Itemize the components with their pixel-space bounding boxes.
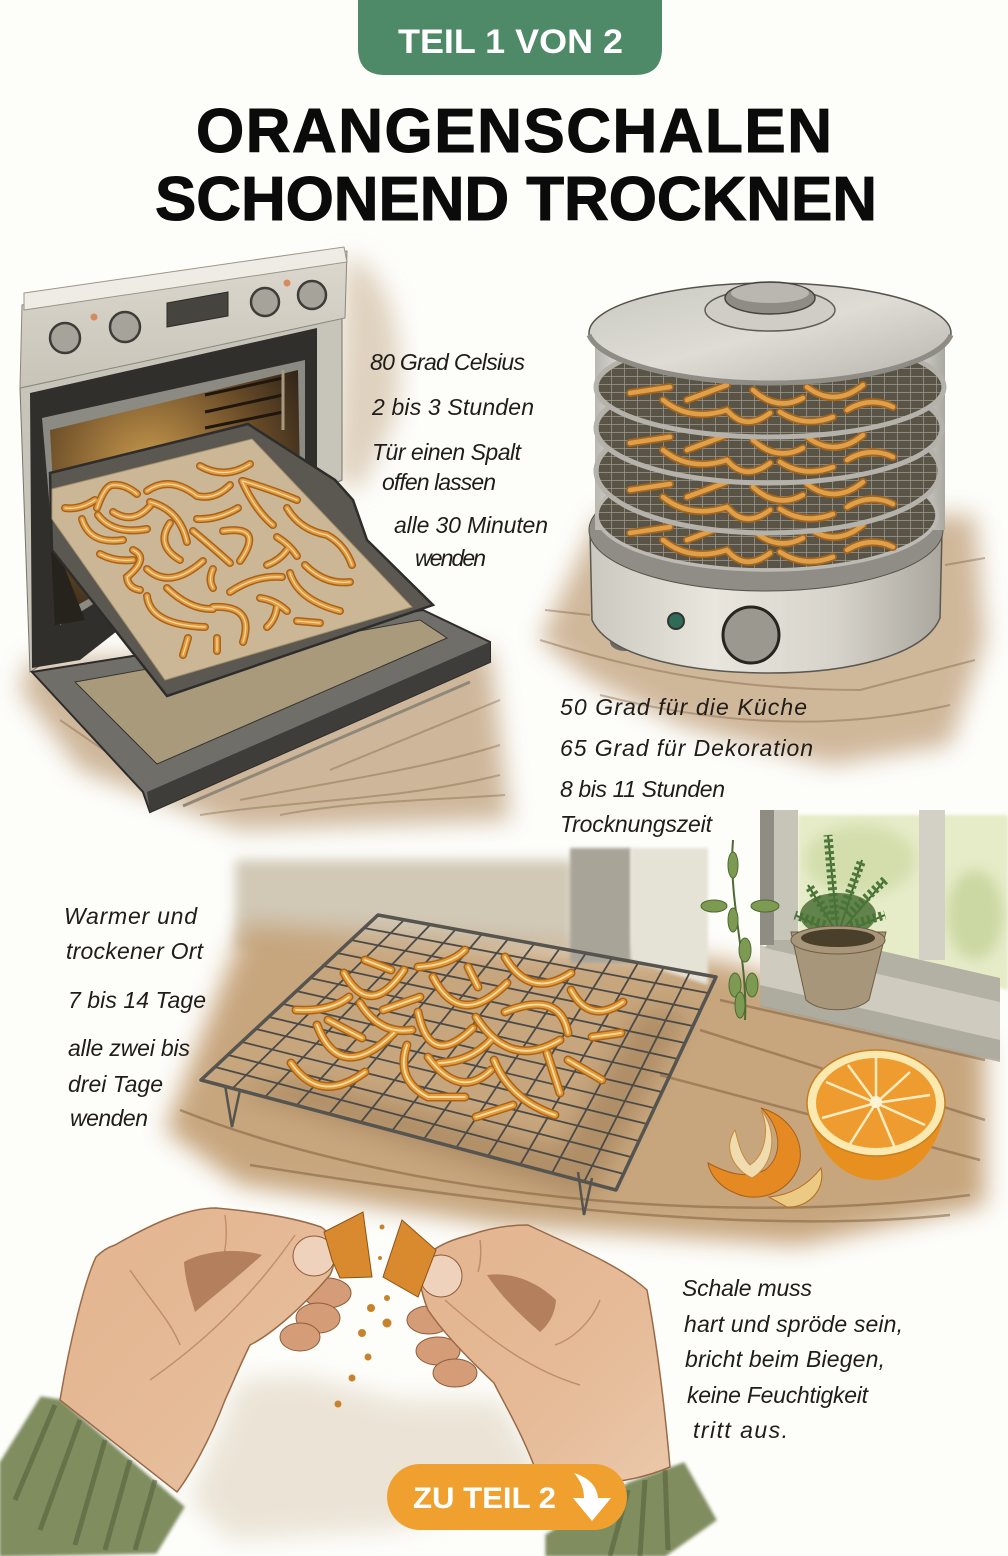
text block: oven notes: Tür einen Spalt <box>372 439 523 465</box>
text block: doneness test notes: Schale muss <box>682 1275 812 1301</box>
panel: hands breaking peel <box>0 1208 716 1556</box>
dehydrator dial <box>723 607 779 663</box>
text block: air drying notes: 7 bis 14 Tage <box>68 987 206 1013</box>
oven knobs <box>50 281 326 353</box>
button: next part: ZU TEIL 2 <box>413 1482 556 1515</box>
tier 4 <box>597 460 937 570</box>
table wash under hands <box>190 1375 545 1540</box>
dehydrator glass wall <box>595 340 945 530</box>
text block: oven notes: wenden <box>415 545 486 571</box>
button: next part <box>387 1464 627 1530</box>
text block: oven notes: 80 Grad Celsius <box>370 349 526 375</box>
text block: dehydrator notes: 65 Grad für Dekoration <box>560 735 813 761</box>
tier 1 <box>596 337 944 437</box>
title: SCHONEND TROCKNEN <box>155 165 877 234</box>
left fingers <box>280 1278 351 1351</box>
text block: air drying notes: trockener Ort <box>66 938 205 964</box>
oven body <box>20 318 342 672</box>
left thumbnail <box>293 1236 335 1276</box>
dehydrator lid <box>589 283 951 383</box>
panel: oven wash background <box>20 255 510 830</box>
right sleeve <box>546 1463 716 1556</box>
text block: air drying notes <box>64 903 206 1131</box>
crumbs <box>334 1224 392 1408</box>
panel: dehydrator <box>589 282 951 673</box>
text block: air drying notes: drei Tage <box>68 1071 163 1097</box>
right palm shadow <box>487 1274 556 1332</box>
text block: dehydrator notes: 50 Grad für die Küche <box>560 694 807 720</box>
panel: cooling rack with peels <box>201 915 716 1215</box>
text block: dehydrator notes <box>560 694 813 837</box>
text block: doneness test notes: bricht beim Biegen, <box>685 1346 885 1372</box>
panel: dehydrator wash background <box>540 515 985 765</box>
rack legs <box>225 1085 592 1215</box>
left sleeve <box>0 1397 184 1556</box>
header tab: TEIL 1 VON 2 <box>398 23 623 61</box>
oven display <box>167 292 228 327</box>
panel: oven <box>20 247 490 812</box>
dehydrator base <box>590 530 942 673</box>
text block: oven notes <box>370 349 548 571</box>
text block: doneness test notes: hart und spröde sein, <box>684 1311 903 1337</box>
parchment paper <box>52 439 412 680</box>
open oven door <box>32 610 490 812</box>
text block: doneness test notes <box>682 1275 903 1443</box>
right fingers <box>407 1306 477 1387</box>
text block: dehydrator notes: Trocknungszeit <box>560 811 714 837</box>
text block: air drying notes: Warmer und <box>64 903 198 929</box>
text block: oven notes: alle 30 Minuten <box>394 512 548 538</box>
title <box>155 97 877 234</box>
dehydrator feet <box>610 633 640 651</box>
icon: potted herb <box>791 835 886 1010</box>
left palm shadow <box>184 1251 262 1312</box>
title: ORANGENSCHALEN <box>196 97 832 166</box>
text block: dehydrator notes: 8 bis 11 Stunden <box>560 776 725 802</box>
right hand <box>420 1225 670 1484</box>
dried peels <box>291 950 623 1117</box>
oven interior <box>50 370 300 615</box>
broken peel pieces <box>324 1212 372 1278</box>
panel: drying scene background <box>165 848 985 1245</box>
text block: air drying notes: alle zwei bis <box>68 1035 190 1061</box>
text block: doneness test notes: keine Feuchtigkeit <box>687 1382 870 1408</box>
tier 3 <box>596 409 940 533</box>
header tab <box>358 0 662 75</box>
orange peels on tray <box>65 464 352 655</box>
text block: air drying notes: wenden <box>70 1105 148 1131</box>
baking tray <box>50 424 433 696</box>
icon: curved arrow <box>573 1473 611 1521</box>
left hand <box>60 1208 334 1492</box>
window with greenery <box>760 810 1008 1062</box>
rack grid <box>201 915 716 1190</box>
tier 2 <box>596 373 942 483</box>
text block: doneness test notes: tritt aus. <box>693 1417 788 1443</box>
icon: hanging vine <box>701 840 779 1020</box>
icon: orange peel curl <box>708 1108 822 1207</box>
text block: oven notes: 2 bis 3 Stunden <box>371 394 534 420</box>
icon: halved orange <box>807 1050 945 1180</box>
text block: oven notes: offen lassen <box>382 469 496 495</box>
dehydrator indicator light <box>668 613 684 629</box>
right thumbnail <box>420 1255 462 1297</box>
oven control panel <box>20 251 347 388</box>
